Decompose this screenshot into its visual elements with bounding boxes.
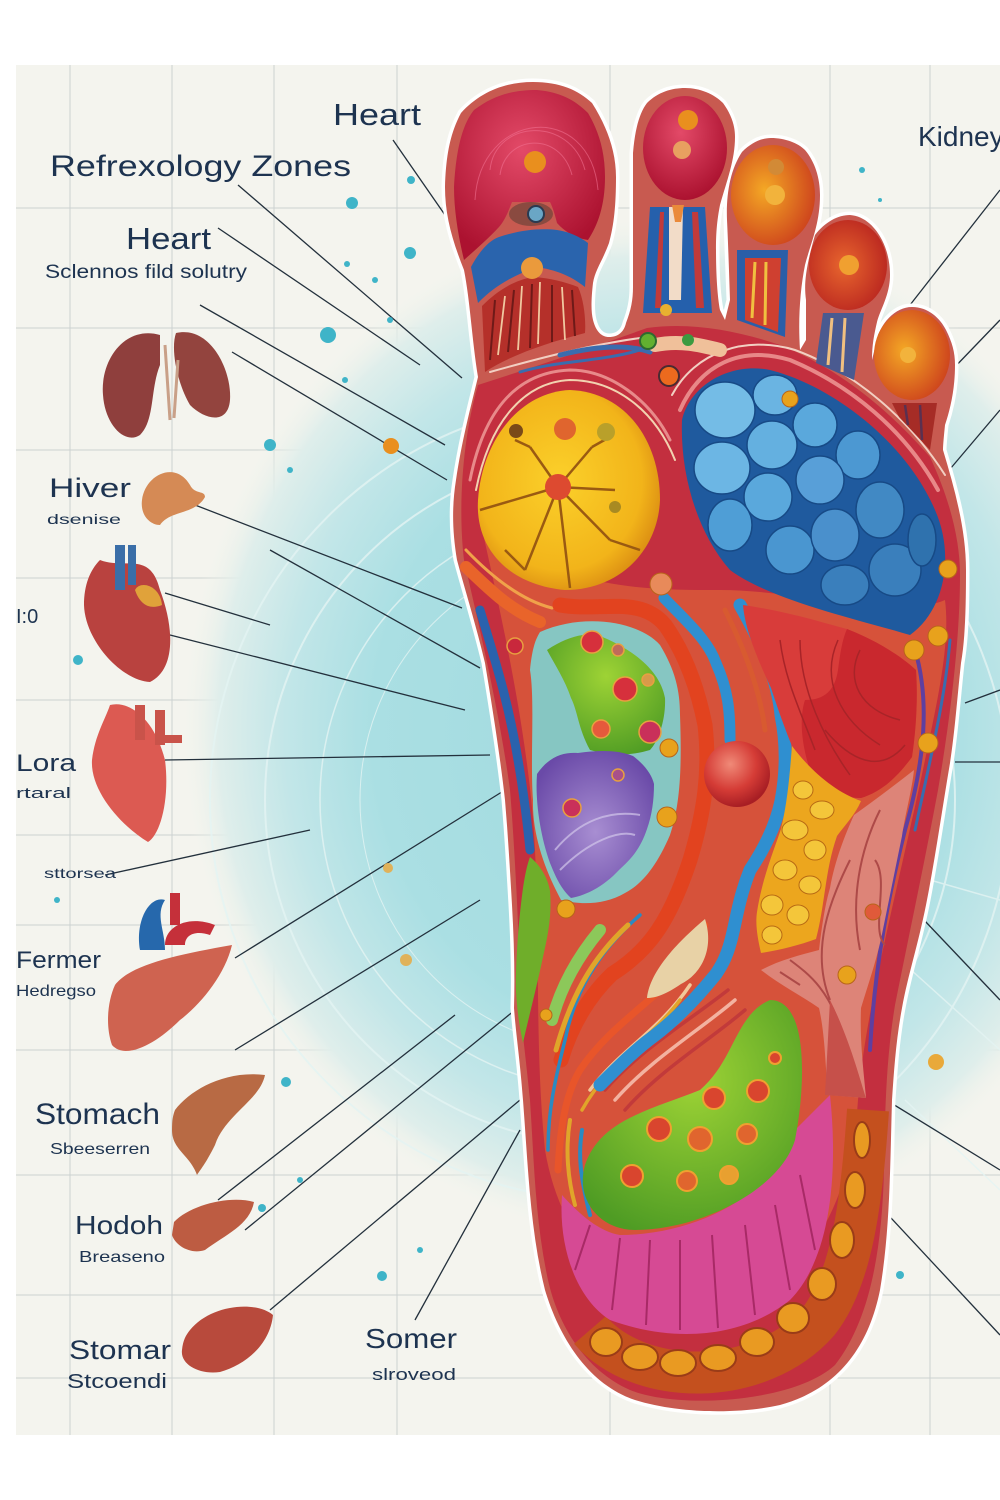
label: hiver: Hiver (49, 473, 131, 503)
teal radial backdrop (160, 200, 1000, 1260)
heel orange band (590, 1110, 870, 1376)
concentric top bands (470, 338, 945, 490)
label: heart top: Heart (333, 97, 421, 132)
icon: liver small (142, 472, 205, 525)
icon: heart 2 (92, 704, 182, 842)
paint speckles (54, 167, 944, 1281)
organ illustrations (84, 332, 273, 1373)
icon: kidneys (103, 332, 230, 438)
lower fine stripe bundle (548, 915, 745, 1215)
big toe (454, 90, 605, 372)
gold tissue (756, 746, 861, 953)
label: heart left: Heart (126, 221, 211, 256)
cream patch (647, 919, 708, 998)
foot silhouette (445, 82, 966, 1411)
yellow organ (478, 390, 660, 590)
blue vessels (600, 598, 792, 1085)
pink tissue (761, 770, 914, 1098)
label: io: I:0 (16, 606, 38, 628)
label: stomach: Stomach (35, 1098, 160, 1131)
small red nodes (507, 631, 661, 817)
label: stomar caption: Stcoendi (67, 1371, 167, 1393)
label: hiver caption: dsenise (47, 511, 121, 527)
label: lora caption: rtaral (16, 785, 71, 802)
heel green organ (583, 1000, 802, 1230)
label: hodoh caption: Breaseno (79, 1249, 165, 1266)
big toe blue band (471, 229, 588, 303)
red organ (743, 605, 917, 798)
midfoot teal surround (530, 621, 681, 903)
label: title: Refrexology Zones (50, 150, 351, 183)
big red ball (704, 741, 770, 807)
blue organ (682, 368, 945, 635)
sole body (461, 326, 960, 1401)
label: small note: sttorsea (44, 865, 116, 881)
icon: heart with vessels (108, 893, 232, 1051)
big toe red stripes (482, 277, 585, 372)
midfoot purple organ (537, 751, 654, 898)
label: lora: Lora (16, 750, 77, 777)
label: heart caption: Sclennos fild solutry (45, 262, 248, 283)
label: femer: Fermer (16, 947, 101, 974)
green and orange arch dots (640, 333, 694, 386)
label: somer caption: slroveod (372, 1365, 456, 1384)
pink heel band (561, 1095, 833, 1334)
left green strip (516, 857, 551, 1043)
label: stomach caption: Sbeeserren (50, 1141, 150, 1158)
toes 2 to 5 (643, 96, 950, 450)
icon: stomach 2 (172, 1200, 254, 1251)
icon: heart 1 (84, 545, 170, 682)
foot (445, 82, 966, 1411)
leader lines (105, 140, 1000, 1335)
side vessels (466, 550, 950, 1060)
organ dots (540, 391, 957, 1021)
label: somer: Somer (365, 1323, 457, 1354)
icon: stomach 1 (172, 1074, 265, 1175)
big toe dome (454, 90, 605, 260)
label: hodoh: Hodoh (75, 1210, 163, 1240)
label: stomar: Stomar (69, 1335, 171, 1365)
icon: stomach 3 (182, 1307, 273, 1373)
mid foot base (480, 520, 946, 1310)
midfoot green organ (547, 634, 665, 754)
label: femer caption: Hedregso (16, 983, 96, 1000)
